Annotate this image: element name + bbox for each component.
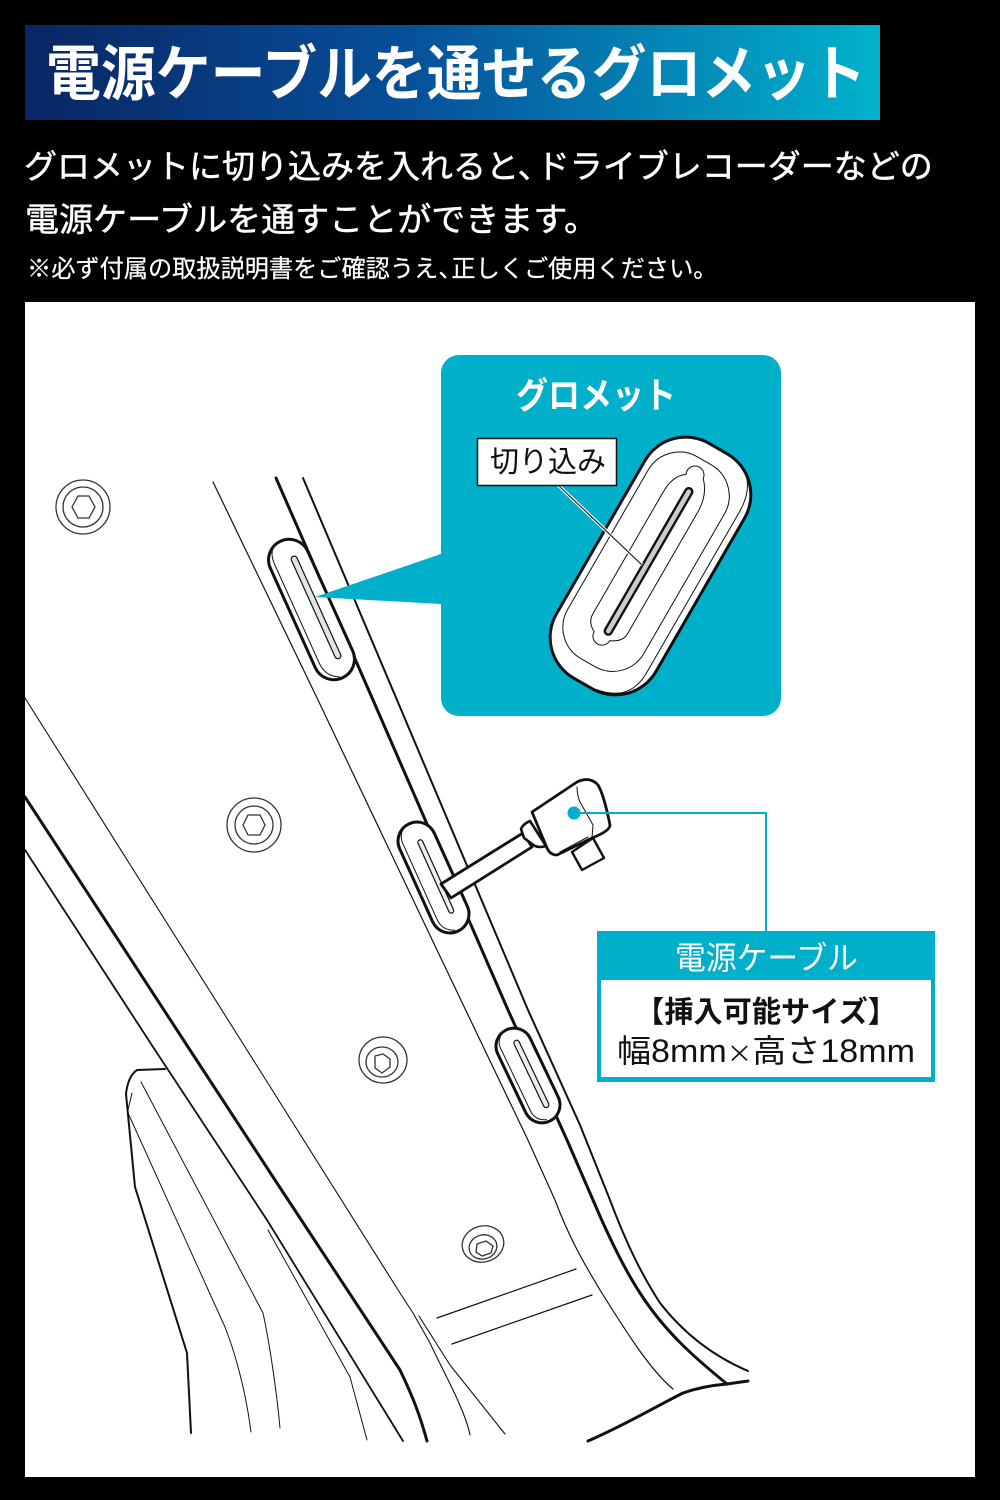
description text: グロメットに切り込みを入れると、ドライブレコーダーなどの bbox=[24, 148, 933, 185]
grommet: lower bbox=[490, 1022, 566, 1129]
label: slit bbox=[478, 438, 616, 486]
grommet: upper bbox=[262, 533, 361, 686]
info box: power cable size: 電源ケーブル bbox=[675, 940, 858, 976]
description text: 電源ケーブルを通すことができます。 bbox=[25, 201, 598, 238]
leader line: power cable bbox=[568, 806, 766, 932]
info box: power cable size: 【挿入可能サイズ】 bbox=[635, 995, 897, 1029]
note text: ※必ず付属の取扱説明書をご確認うえ、正しくご使用ください。 bbox=[27, 256, 717, 283]
grommet: middle with cable bbox=[392, 816, 475, 939]
title banner bbox=[25, 25, 880, 120]
icon: screw 1 bbox=[56, 480, 110, 534]
title banner: 電源ケーブルを通せるグロメット bbox=[46, 41, 866, 108]
callout: grommet detail bbox=[315, 355, 781, 716]
icon: screw 4 bbox=[458, 1221, 508, 1267]
icon: screw 2 bbox=[227, 798, 281, 852]
cable connector bbox=[441, 780, 610, 898]
panel: illustration bbox=[25, 302, 975, 1477]
info box: power cable size bbox=[597, 931, 935, 1082]
leader line: slit bbox=[558, 485, 642, 565]
info box: power cable size: 幅8mm ×高さ18mm bbox=[617, 1033, 915, 1069]
icon: screw 3 bbox=[359, 1037, 407, 1083]
description text bbox=[24, 148, 933, 238]
line drawing: vehicle body panel bbox=[25, 478, 748, 1441]
label: slit: 切り込み bbox=[490, 446, 606, 479]
grommet enlarged bbox=[533, 420, 768, 712]
heading: grommet: グロメット bbox=[516, 375, 676, 416]
